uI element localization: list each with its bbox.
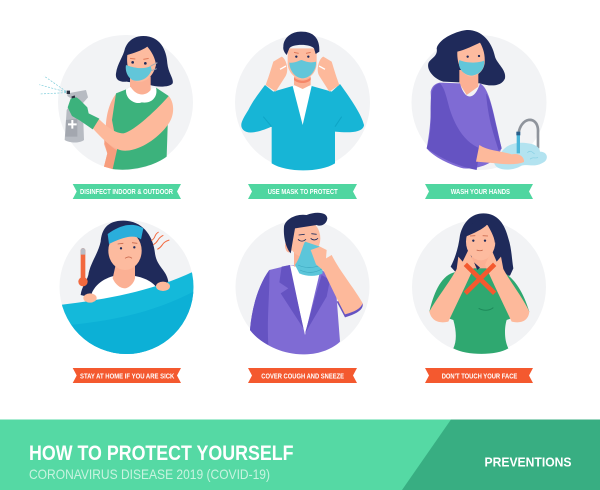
ribbon: cover cough and sneeze: COVER COUGH AND SNEEZE xyxy=(261,373,344,380)
subtitle: CORONAVIRUS DISEASE 2019 (COVID-19) xyxy=(29,466,270,482)
illustration: woman not touching face xyxy=(429,213,529,354)
illustration: woman spraying disinfectant xyxy=(39,36,173,170)
background circle xyxy=(412,220,546,354)
panel: disinfect indoor and outdoor xyxy=(39,35,193,199)
panel: stay at home if you are sick xyxy=(53,220,197,383)
background circle xyxy=(412,35,546,170)
illustration: man covering cough xyxy=(250,213,363,354)
background circle xyxy=(236,220,370,354)
panel: use mask to protect xyxy=(235,32,370,199)
ribbon: use mask to protect xyxy=(248,184,357,199)
ribbon: wash your hands: WASH YOUR HANDS xyxy=(451,189,510,196)
banner background xyxy=(0,420,600,490)
panel: wash your hands xyxy=(412,30,547,199)
footer banner xyxy=(0,420,600,490)
panel: cover cough and sneeze xyxy=(236,213,370,383)
illustration: man putting on mask xyxy=(241,32,364,170)
panel: don't touch your face xyxy=(412,213,546,383)
ribbon: stay at home if you are sick xyxy=(73,368,181,383)
title: HOW TO PROTECT YOURSELF xyxy=(29,442,294,465)
ribbon: disinfect indoor and outdoor xyxy=(73,184,181,199)
ribbon: don't touch your face xyxy=(425,368,533,383)
ribbon: stay at home if you are sick: STAY AT HOME IF YOU ARE SICK xyxy=(80,373,174,380)
ribbon: don't touch your face: DON'T TOUCH YOUR FACE xyxy=(442,373,518,380)
ribbon: cover cough and sneeze xyxy=(248,368,357,383)
background circle xyxy=(235,35,370,170)
background circle xyxy=(60,220,194,354)
ribbon: disinfect indoor and outdoor: DISINFECT INDOOR & OUTDOOR xyxy=(80,189,173,196)
banner dark corner xyxy=(402,420,600,490)
illustration: woman washing hands xyxy=(427,30,547,170)
ribbon: wash your hands xyxy=(425,184,533,199)
illustration: sick woman in bed xyxy=(62,220,194,354)
ribbon: use mask to protect: USE MASK TO PROTECT xyxy=(268,189,338,196)
preventions label: PREVENTIONS xyxy=(484,455,572,470)
background circle xyxy=(58,35,193,170)
